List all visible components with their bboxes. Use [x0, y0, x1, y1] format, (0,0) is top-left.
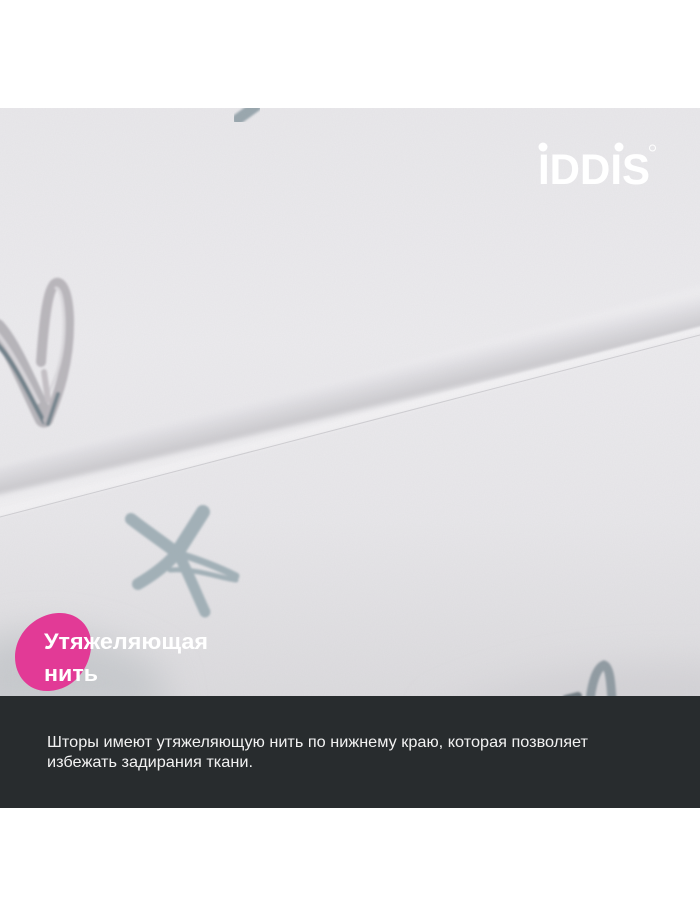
caption text: избежать задирания ткани. [47, 754, 253, 771]
heading: Утяжеляющая [44, 629, 208, 654]
heading: нить [44, 661, 98, 686]
logo: IDDIS: IDDIS [538, 146, 650, 194]
pink blob accent [15, 613, 91, 691]
photo: fabric curtain with weighted hem [0, 106, 700, 720]
caption text: Шторы имеют утяжеляющую нить по нижнему краю, которая позволяет [47, 734, 589, 751]
fold and seam of the hem [0, 305, 700, 518]
starfish print [131, 512, 236, 612]
partial print at bottom right [566, 665, 612, 700]
fabric weave grain [0, 108, 700, 696]
infographic canvas [0, 108, 700, 808]
dark caption panel [0, 696, 700, 808]
caption text [47, 734, 589, 771]
heart print [0, 283, 69, 424]
partial print at top edge [238, 106, 256, 119]
heading [44, 629, 208, 686]
